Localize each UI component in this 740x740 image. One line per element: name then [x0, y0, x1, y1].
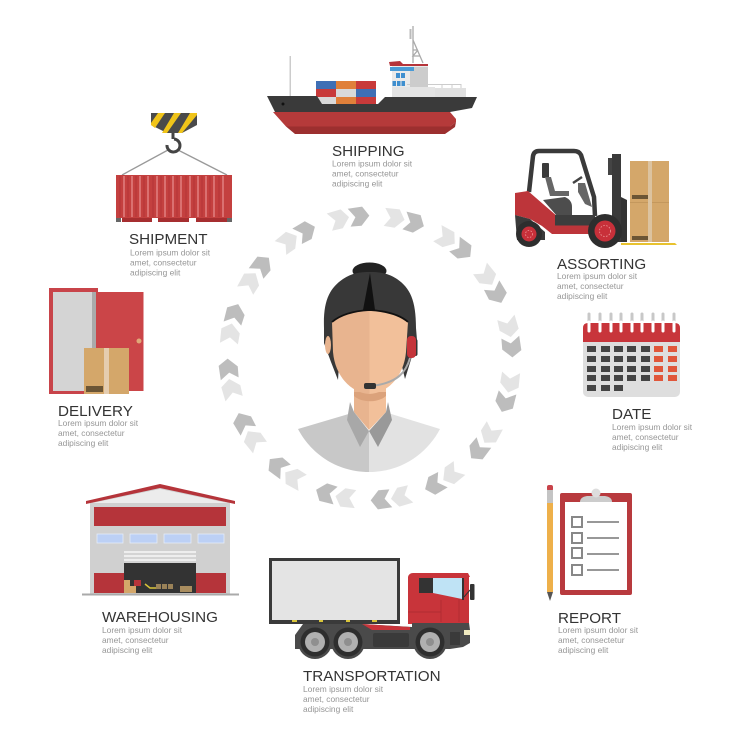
panel: report: [547, 485, 639, 655]
description: adipiscing elit: [558, 645, 609, 655]
description: adipiscing elit: [557, 291, 608, 301]
icon: forklift: [515, 151, 677, 248]
left ear: [325, 336, 331, 354]
description: adipiscing elit: [303, 704, 354, 714]
icon: truck: [269, 558, 474, 659]
hair bun: [352, 262, 386, 280]
icon: clipboard: [560, 488, 632, 595]
chevron ring: [218, 206, 522, 510]
panel: warehousing: [82, 484, 239, 655]
collar: [347, 402, 392, 447]
description: adipiscing elit: [612, 442, 663, 452]
description: Lorem ipsum dolor sit: [332, 158, 413, 168]
description: adipiscing elit: [332, 178, 383, 188]
icon: cargo ship: [267, 26, 477, 134]
icon: calendar: [583, 314, 680, 397]
description: adipiscing elit: [102, 645, 153, 655]
heading: WAREHOUSING: [102, 609, 218, 626]
description: amet, consectetur: [130, 258, 197, 268]
heading: SHIPMENT: [129, 231, 207, 248]
description: amet, consectetur: [303, 694, 370, 704]
description: amet, consectetur: [557, 281, 624, 291]
description: amet, consectetur: [558, 635, 625, 645]
panel: assorting: [515, 151, 677, 301]
icon: crane hook with container: [116, 113, 232, 222]
panel: transportation: [269, 558, 474, 714]
description: Lorem ipsum dolor sit: [102, 625, 183, 635]
description: Lorem ipsum dolor sit: [612, 422, 693, 432]
description: amet, consectetur: [332, 168, 399, 178]
icon: open door with box: [49, 288, 144, 394]
description: amet, consectetur: [102, 635, 169, 645]
description: Lorem ipsum dolor sit: [130, 248, 211, 258]
description: Lorem ipsum dolor sit: [558, 625, 639, 635]
heading: DELIVERY: [58, 403, 133, 420]
face: [332, 310, 408, 394]
description: amet, consectetur: [58, 428, 125, 438]
heading: ASSORTING: [557, 256, 646, 273]
heading: TRANSPORTATION: [303, 668, 441, 685]
shoulders: [298, 413, 440, 472]
panel: shipment: [116, 113, 232, 278]
description: adipiscing elit: [130, 268, 181, 278]
neck: [354, 385, 386, 430]
panel: date: [583, 314, 693, 452]
heading: DATE: [612, 406, 651, 423]
heading: SHIPPING: [332, 143, 405, 160]
headset: [364, 336, 418, 389]
panel: shipping: [267, 26, 477, 188]
panel: delivery: [49, 288, 144, 448]
description: adipiscing elit: [58, 438, 109, 448]
description: Lorem ipsum dolor sit: [557, 271, 638, 281]
hair: [324, 272, 417, 380]
icon: pencil: [547, 485, 553, 601]
heading: REPORT: [558, 610, 621, 627]
description: amet, consectetur: [612, 432, 679, 442]
description: Lorem ipsum dolor sit: [58, 418, 139, 428]
icon: warehouse: [82, 484, 239, 596]
icon: customer service agent: [298, 262, 440, 472]
description: Lorem ipsum dolor sit: [303, 684, 384, 694]
